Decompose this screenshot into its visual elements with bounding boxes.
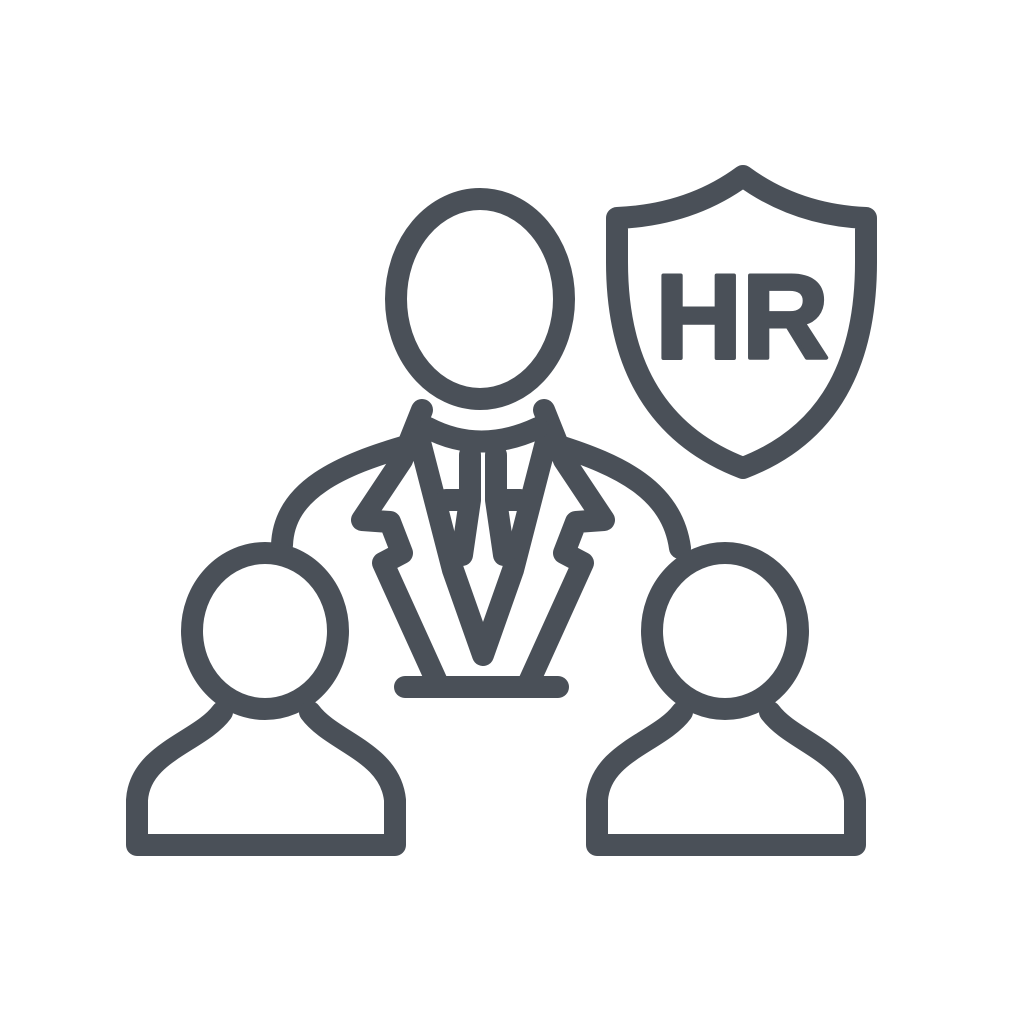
icon: right person <box>597 553 855 845</box>
base bar <box>405 676 558 698</box>
shoulders <box>282 445 680 548</box>
icon: HR shield <box>617 176 866 468</box>
shield label: HR <box>655 250 829 384</box>
manager head <box>396 199 564 399</box>
shirt collar and tie <box>428 428 538 555</box>
icon: manager figure <box>282 199 680 687</box>
icon: left person <box>137 553 395 845</box>
suit jacket <box>362 410 604 682</box>
